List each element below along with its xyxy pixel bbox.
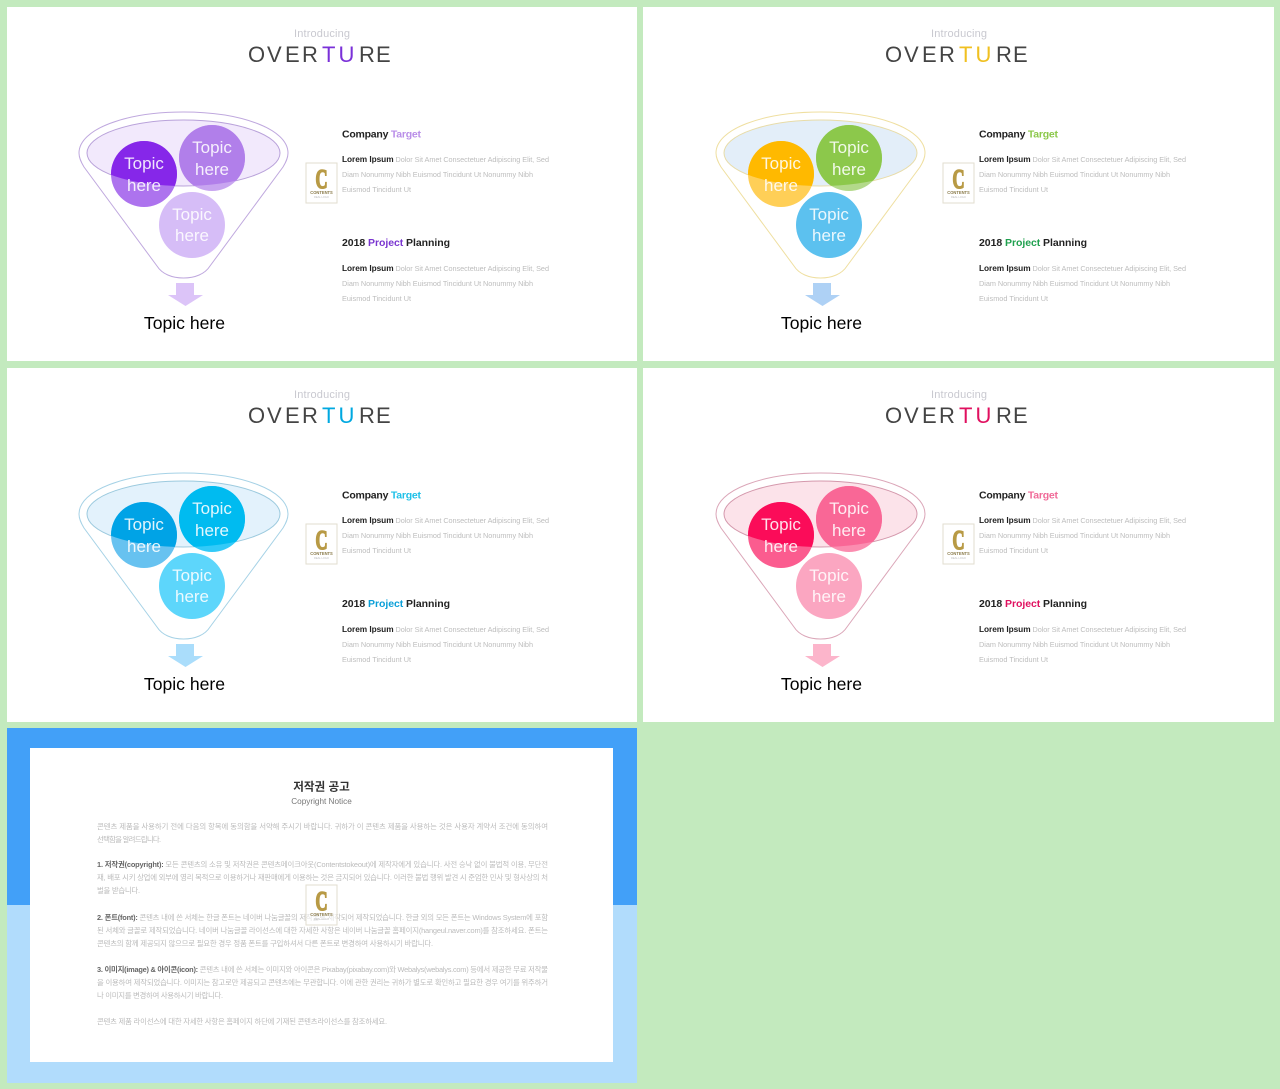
funnel diagram: multicolor: Topic <box>761 154 801 173</box>
funnel diagram: multicolor: Topic <box>809 205 849 224</box>
arrow: blue <box>805 283 840 306</box>
text block: company target: Lorem Ipsum Dolor Sit Amet Consectetuer Adipiscing Elit, Sed <box>342 515 549 525</box>
text block: project planning: Diam Nonummy Nibh Euismod Tincidunt Ut Nonummy Nibh <box>342 640 533 649</box>
text block: project planning: Lorem Ipsum Dolor Sit Amet Consectetuer Adipiscing Elit, Sed <box>979 263 1186 273</box>
text block: company target: Euismod Tincidunt Ut <box>979 546 1048 555</box>
text block: company target <box>342 128 549 194</box>
text block: font clause: 콘텐츠의 함께 제공되지 않으므로 필요한 경우 정품 폰트를 구입하셔서 다른 폰트로 변경하여 사용하시기 바랍니다. <box>97 939 433 948</box>
title: purple: RE <box>359 42 391 67</box>
text block: company target: Company Target <box>979 128 1058 140</box>
text block: company target <box>342 490 549 555</box>
text block: copyright clause <box>97 860 548 895</box>
text block: project planning: Euismod Tincidunt Ut <box>979 655 1048 664</box>
logo badge: CONTENTS <box>310 190 333 195</box>
funnel diagram: purple: Topic <box>124 154 164 173</box>
funnel diagram: purple: here <box>127 176 161 195</box>
funnel diagram: multicolor: here <box>812 226 846 245</box>
text block: notice intro: 선택함을 알려드립니다. <box>97 835 161 844</box>
title: blue: RE <box>359 403 391 428</box>
logo badge: REAL LOGO <box>314 195 329 199</box>
text block: company target <box>979 128 1186 194</box>
title: pink: TU <box>959 403 991 428</box>
logo badge: copyright: CONTENTS <box>310 912 333 917</box>
text block: project planning: 2018 Project Planning <box>342 237 450 249</box>
text block: company target: Company Target <box>342 490 422 502</box>
text block: image and icon clause: 나 이미지를 변경하여 사용하시기 바랍니다. <box>97 991 223 1000</box>
funnel diagram: blue: Topic <box>172 566 212 585</box>
panel: blue slide <box>7 368 637 722</box>
text block: project planning <box>342 598 549 664</box>
arrow: light blue <box>168 644 203 667</box>
text block: company target: Company Target <box>342 128 422 140</box>
funnel diagram: multicolor: Topic <box>829 138 869 157</box>
funnel diagram: pink: here <box>812 587 846 606</box>
funnel diagram: pink: Topic <box>829 499 869 518</box>
text block: project planning <box>342 237 549 303</box>
funnel diagram: blue: Topic <box>124 515 164 534</box>
logo badge <box>306 163 337 203</box>
text block: project planning: Euismod Tincidunt Ut <box>342 655 411 664</box>
title: purple: Introducing <box>294 28 350 40</box>
text block: copyright clause: 재, 배포 시키 상업에 외부에 영리 목적으로 이용하거나 재판매에게 이용하는 것은 금지되어 있습니다. 이러한 불법 행위 발견 시 준엄한 민사 및 형사상의 처 <box>97 873 548 882</box>
text block: company target: Lorem Ipsum Dolor Sit Amet Consectetuer Adipiscing Elit, Sed <box>979 154 1186 164</box>
funnel diagram: multicolor: here <box>764 176 798 195</box>
text block: project planning: Lorem Ipsum Dolor Sit Amet Consectetuer Adipiscing Elit, Sed <box>342 624 549 634</box>
funnel caption: Topic here <box>144 674 225 694</box>
title: gold: TU <box>959 42 991 67</box>
text block: project planning: Lorem Ipsum Dolor Sit Amet Consectetuer Adipiscing Elit, Sed <box>342 263 549 273</box>
text block: project planning: 2018 Project Planning <box>979 237 1087 249</box>
funnel diagram: pink <box>716 473 925 639</box>
funnel diagram: purple <box>79 112 288 278</box>
logo badge <box>943 163 974 203</box>
logo badge: copyright <box>306 885 337 925</box>
funnel diagram: multicolor <box>716 112 925 278</box>
title: pink: RE <box>996 403 1028 428</box>
title: gold: OVER <box>885 42 955 67</box>
title: blue <box>248 389 391 428</box>
logo badge: C <box>315 525 328 555</box>
text block: font clause: 된 서체와 글꼴로 제작되었습니다. 네이버 나눔글꼴 라이선스에 대한 자세한 사항은 네이버 나눔글꼴 홈페이지(hangeul.naver.com)를 참조하세요. 폰트는 <box>97 926 548 935</box>
text block: company target: Euismod Tincidunt Ut <box>342 185 411 194</box>
title: purple: TU <box>322 42 354 67</box>
funnel diagram: purple: here <box>195 160 229 179</box>
text block: project planning <box>979 237 1186 303</box>
heading: copyright notice <box>291 780 352 806</box>
title: blue: TU <box>322 403 354 428</box>
title: blue: OVER <box>248 403 318 428</box>
text block: image and icon clause: 3. 이미지(image) & 아이콘(icon): 콘텐츠 내에 쓴 서체는 이미지와 아이콘은 Pixabay(pixabay.com)와 Webalys(webalys.com) 등에서 제공한 무료 저작물 <box>97 965 548 974</box>
text block: company target: Euismod Tincidunt Ut <box>342 546 411 555</box>
logo badge: copyright: REAL LOGO <box>314 917 329 921</box>
text block: copyright clause: 1. 저작권(copyright): 모든 콘텐츠의 소유 및 저작권은 콘텐츠메이크아웃(Contentstokeout)에 제작자에게 있습니다. 사전 승낙 없이 불법적 이용, 무단전 <box>97 860 548 869</box>
text block: copyright clause: 벌을 받습니다. <box>97 886 140 895</box>
text block: company target: Company Target <box>979 490 1058 502</box>
funnel diagram: blue: here <box>175 587 209 606</box>
funnel diagram: blue <box>79 473 288 639</box>
logo badge <box>306 524 337 564</box>
panel: pink slide <box>643 368 1274 722</box>
logo badge: REAL LOGO <box>314 556 329 560</box>
funnel diagram: purple: Topic <box>192 138 232 157</box>
logo badge: REAL LOGO <box>951 556 966 560</box>
text block: company target: Lorem Ipsum Dolor Sit Amet Consectetuer Adipiscing Elit, Sed <box>979 515 1186 525</box>
logo badge: copyright: C <box>315 886 328 916</box>
title: gold: Introducing <box>931 28 987 40</box>
funnel diagram: pink: here <box>832 521 866 540</box>
text block: license footer: 콘텐츠 제품 라이선스에 대한 자세한 사항은 홈페이지 하단에 기재된 콘텐츠라이선스를 참조하세요. <box>97 1017 387 1026</box>
text block: company target: Euismod Tincidunt Ut <box>979 185 1048 194</box>
text block: image and icon clause: 을 이용하여 제작되었습니다. 이미지는 참고로만 제공되고 콘텐츠에는 무관합니다. 이에 관한 권리는 귀하가 별도로 확인하고 필요한 경우 여기를 위주하거 <box>97 978 548 987</box>
panel: multicolor slide <box>643 7 1274 361</box>
title: pink: OVER <box>885 403 955 428</box>
text block: company target: Diam Nonummy Nibh Euismod Tincidunt Ut Nonummy Nibh <box>979 531 1170 540</box>
text block: project planning <box>979 598 1186 664</box>
text block: project planning: Diam Nonummy Nibh Euismod Tincidunt Ut Nonummy Nibh <box>979 279 1170 288</box>
logo badge: C <box>315 164 328 194</box>
text block: font clause: 2. 폰트(font): 콘텐츠 내에 쓴 서체는 한글 폰트는 네이버 나눔글꼴의 저작물로 제작되어 제작되었습니다. 한글 외의 모든 폰트는 Windows System에 포함 <box>97 913 548 922</box>
funnel diagram: blue: here <box>127 537 161 556</box>
title: gold: RE <box>996 42 1028 67</box>
logo badge: C <box>952 525 965 555</box>
text block: project planning: Euismod Tincidunt Ut <box>979 294 1048 303</box>
text block: company target: Lorem Ipsum Dolor Sit Amet Consectetuer Adipiscing Elit, Sed <box>342 154 549 164</box>
text block: notice intro <box>97 822 548 844</box>
text block: project planning: 2018 Project Planning <box>979 598 1087 610</box>
funnel diagram: blue: here <box>195 521 229 540</box>
logo badge: CONTENTS <box>310 551 333 556</box>
text block: company target: Diam Nonummy Nibh Euismod Tincidunt Ut Nonummy Nibh <box>342 170 533 179</box>
logo badge: CONTENTS <box>947 190 970 195</box>
text block: company target <box>979 490 1186 555</box>
logo badge: CONTENTS <box>947 551 970 556</box>
text block: project planning: Lorem Ipsum Dolor Sit Amet Consectetuer Adipiscing Elit, Sed <box>979 624 1186 634</box>
funnel caption: Topic here <box>781 313 862 333</box>
logo badge: REAL LOGO <box>951 195 966 199</box>
heading: copyright notice: 저작권 공고 <box>293 780 350 794</box>
title: blue: Introducing <box>294 389 350 401</box>
heading: copyright notice: Copyright Notice <box>291 797 352 806</box>
text block: project planning: Diam Nonummy Nibh Euismod Tincidunt Ut Nonummy Nibh <box>342 279 533 288</box>
arrow: pink <box>805 644 840 667</box>
text block: company target: Diam Nonummy Nibh Euismod Tincidunt Ut Nonummy Nibh <box>342 531 533 540</box>
text block: project planning: Euismod Tincidunt Ut <box>342 294 411 303</box>
title: purple <box>248 28 391 67</box>
text block: font clause <box>97 913 548 948</box>
title: gold <box>885 28 1028 67</box>
panel: purple slide <box>7 7 637 361</box>
funnel diagram: blue: Topic <box>192 499 232 518</box>
logo badge <box>943 524 974 564</box>
panel: copyright notice <box>7 728 637 1083</box>
text block: project planning: 2018 Project Planning <box>342 598 450 610</box>
funnel diagram: pink: Topic <box>761 515 801 534</box>
text block: project planning: Diam Nonummy Nibh Euismod Tincidunt Ut Nonummy Nibh <box>979 640 1170 649</box>
arrow: purple <box>168 283 203 306</box>
funnel diagram: purple: here <box>175 226 209 245</box>
funnel caption: Topic here <box>781 674 862 694</box>
title: pink: Introducing <box>931 389 987 401</box>
funnel caption: Topic here <box>144 313 225 333</box>
funnel diagram: pink: here <box>764 537 798 556</box>
text block: company target: Diam Nonummy Nibh Euismod Tincidunt Ut Nonummy Nibh <box>979 170 1170 179</box>
text block: image and icon clause <box>97 965 548 1000</box>
text block: notice intro: 콘텐츠 제품을 사용하기 전에 다음의 항목에 동의함을 서약해 주시기 바랍니다. 귀하가 이 콘텐츠 제품을 사용하는 것은 사용자 계약서 조건에 동의하여 <box>97 822 548 831</box>
funnel diagram: purple: Topic <box>172 205 212 224</box>
title: purple: OVER <box>248 42 318 67</box>
logo badge: C <box>952 164 965 194</box>
title: pink <box>885 389 1028 428</box>
funnel diagram: pink: Topic <box>809 566 849 585</box>
funnel diagram: multicolor: here <box>832 160 866 179</box>
